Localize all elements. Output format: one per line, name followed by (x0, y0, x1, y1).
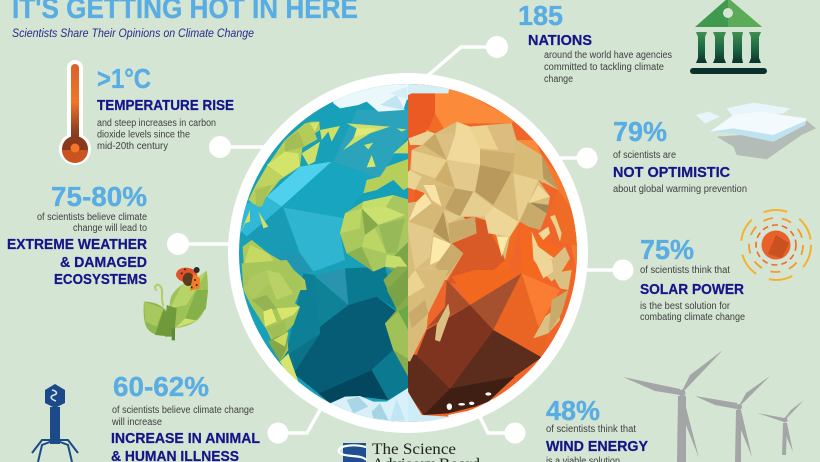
body text: and steep increases in carbon (97, 118, 216, 129)
heading: TEMPERATURE RISE (97, 98, 234, 114)
value: 75-80% (51, 181, 147, 212)
globe: Africa (340, 195, 408, 272)
globe: cool ocean half (230, 80, 410, 430)
logo: The Science Advisory Board (339, 441, 480, 462)
heading: NOT OPTIMISTIC (613, 165, 730, 181)
body text: about global warming prevention (613, 184, 747, 195)
globe: lower warm facets and brown south (405, 270, 572, 430)
heading (111, 431, 260, 462)
panel: solar power (640, 210, 811, 323)
heading: SOLAR POWER (640, 282, 744, 298)
body text (544, 50, 672, 85)
body text: committed to tackling climate (544, 62, 664, 73)
globe (228, 73, 588, 433)
body text (97, 118, 216, 152)
value: 60-62% (113, 371, 209, 402)
heading: & DAMAGED (60, 255, 147, 271)
icon: thermometer (59, 60, 91, 165)
body text (640, 301, 745, 323)
value: 75% (640, 234, 694, 265)
globe: warm land half (405, 80, 582, 430)
icon: wind turbines (623, 350, 804, 462)
value: 48% (546, 395, 600, 426)
body text: of scientists believe climate change (112, 405, 254, 416)
panel: animal and human illness (32, 371, 260, 462)
icon: virus (32, 384, 78, 462)
value: >1°C (97, 63, 151, 94)
value: 79% (613, 116, 667, 147)
heading: EXTREME WEATHER (7, 237, 147, 253)
body text: of scientists think that (546, 424, 636, 435)
icon: government building (690, 0, 767, 74)
body text: combating climate change (640, 312, 745, 323)
body text: mid-20th century (97, 141, 168, 152)
icon: sun (741, 210, 811, 280)
body text: change will lead to (73, 223, 147, 234)
heading: WIND ENERGY (546, 439, 648, 455)
panel: wind energy (546, 350, 804, 462)
icon: leaf and ladybug (144, 267, 208, 340)
body text: is the best solution for (640, 301, 731, 312)
body text: change (544, 74, 573, 85)
panel: nations (518, 0, 767, 85)
subtitle: Scientists Share Their Opinions on Climate Change (12, 26, 254, 40)
globe: bottom ice (330, 388, 408, 422)
panel: not optimistic (613, 103, 816, 195)
heading: ECOSYSTEMS (54, 272, 147, 288)
body text: of scientists are (613, 150, 676, 161)
globe: Eurasia facets (405, 83, 570, 282)
heading: NATIONS (528, 33, 592, 49)
globe: Arctic ice left (333, 84, 408, 112)
globe: North America and Greenland (240, 122, 410, 233)
icon: ice floes (696, 103, 816, 159)
connector lines and dots (167, 36, 634, 444)
value: 185 (518, 0, 563, 31)
body text: of scientists think that (640, 265, 730, 276)
body text (37, 212, 147, 234)
logo: The Science Advisory Board: The Science (372, 441, 456, 458)
body text: will increase (111, 417, 162, 428)
body text: dioxide levels since the (97, 130, 190, 140)
panel: temperature rise (59, 60, 234, 165)
body text: around the world have agencies (544, 50, 672, 61)
heading (7, 237, 147, 288)
body text (111, 405, 254, 428)
body text: of scientists believe climate (37, 212, 147, 223)
panel: extreme weather (7, 181, 208, 340)
heading: INCREASE IN ANIMAL (111, 431, 260, 447)
globe: South America (243, 240, 307, 290)
